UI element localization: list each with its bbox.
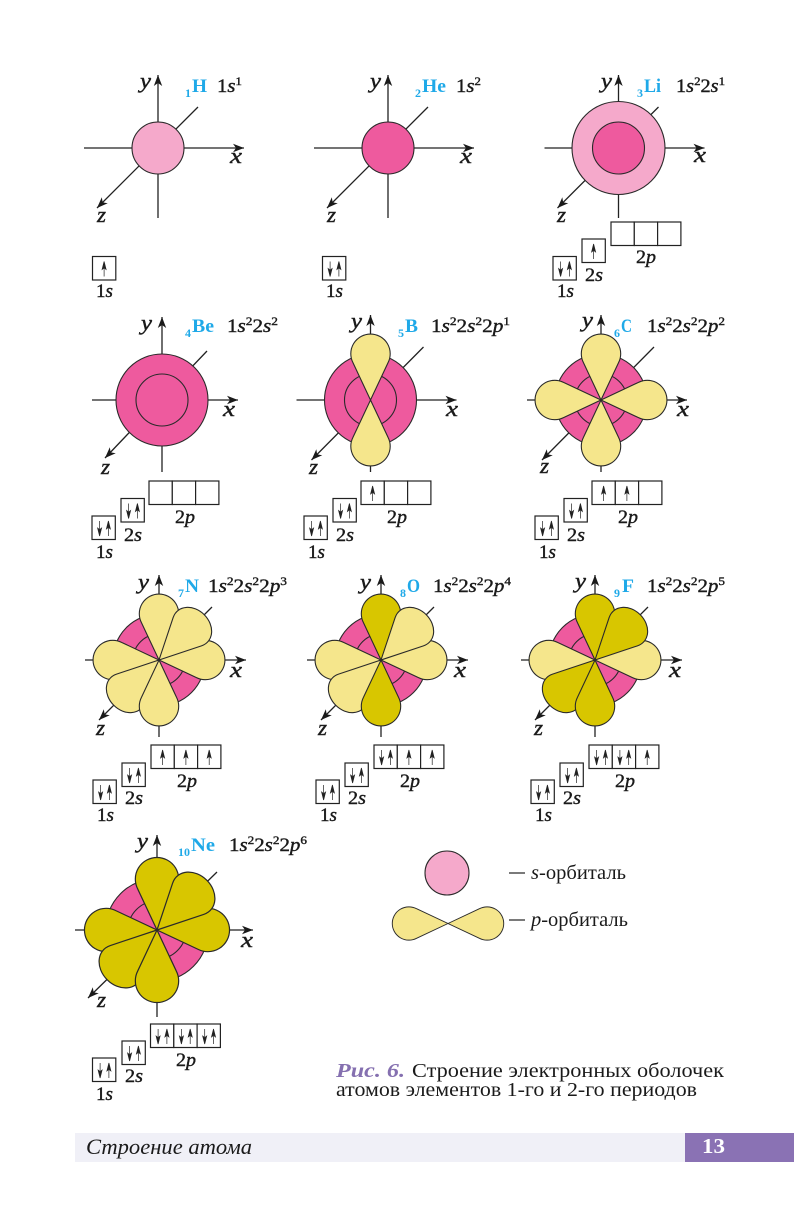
axes xyxy=(314,75,474,218)
axis labels xyxy=(96,828,253,1012)
axis labels: z xyxy=(556,202,566,227)
orbital boxes xyxy=(316,745,444,826)
axis labels: z xyxy=(96,987,106,1012)
electron configuration: 1s xyxy=(227,316,245,337)
electron configuration: 2 xyxy=(452,574,458,588)
orbital boxes: 1s xyxy=(96,281,113,302)
axis labels: y xyxy=(136,569,149,594)
electron configuration: 2 xyxy=(700,76,711,97)
electron configuration: 2 xyxy=(694,74,700,88)
electron configuration: s xyxy=(683,576,691,597)
element symbol xyxy=(614,316,632,340)
page number: 13 xyxy=(702,1134,725,1158)
element symbol: 6 xyxy=(614,326,620,340)
electron configuration: 2 xyxy=(483,576,494,597)
electron configuration: 5 xyxy=(718,574,725,588)
axis labels: y xyxy=(368,68,381,93)
orbital boxes: 2s xyxy=(348,788,366,809)
legend: s orbital: s-орбиталь xyxy=(531,862,626,884)
s orbital xyxy=(132,122,184,174)
axis labels: x xyxy=(445,396,458,421)
panel: neon xyxy=(75,828,307,1105)
element symbol: 4 xyxy=(185,326,191,340)
element symbol: 2 xyxy=(415,86,421,100)
axis labels xyxy=(533,568,681,740)
electron configuration: s xyxy=(469,576,477,597)
axes xyxy=(84,75,244,218)
orbital boxes xyxy=(92,481,219,563)
electron configuration: 2 xyxy=(691,574,697,588)
axis labels: x xyxy=(222,396,235,421)
caption: атомов элементов 1-го и 2-го периодов xyxy=(336,1079,697,1101)
footer xyxy=(75,1133,794,1162)
orbital boxes: 2s xyxy=(124,525,142,546)
element symbol xyxy=(178,835,215,859)
element symbol: N xyxy=(185,576,199,597)
electron configuration: 2 xyxy=(666,574,672,588)
orbital boxes: 2p xyxy=(618,507,638,528)
legend: p orbital: p-орбиталь xyxy=(529,909,628,931)
s orbitals xyxy=(324,354,416,446)
electron configuration: 2 xyxy=(271,314,278,328)
electron configuration: 6 xyxy=(300,833,307,847)
orbital boxes: 1s xyxy=(96,542,113,563)
element symbol: B xyxy=(405,316,418,337)
element symbol: 3 xyxy=(637,86,643,100)
panel: beryllium xyxy=(92,310,278,563)
element symbol xyxy=(178,576,199,600)
axis labels xyxy=(539,307,689,478)
electron configuration: 2 xyxy=(246,314,252,328)
s orbitals xyxy=(335,614,427,706)
orbital boxes: 2s xyxy=(567,525,585,546)
axis labels xyxy=(556,68,706,227)
caption: Строение электронных оболочек xyxy=(412,1060,724,1082)
orbital boxes: 2s xyxy=(336,525,354,546)
orbital boxes: 2p xyxy=(387,507,407,528)
running title: Строение атома xyxy=(86,1134,252,1159)
caption xyxy=(335,1060,724,1101)
element symbol: F xyxy=(622,576,634,597)
electron configuration: 2 xyxy=(672,576,683,597)
axis labels: y xyxy=(358,569,371,594)
panel: helium xyxy=(314,68,481,302)
electron configuration: 1s xyxy=(456,76,474,97)
electron configuration: p xyxy=(492,576,504,597)
electron configuration: 1 xyxy=(235,74,242,88)
electron configuration: 2 xyxy=(457,316,467,337)
s orbitals xyxy=(113,614,205,706)
electron configuration: p xyxy=(490,316,503,337)
orbital boxes: 1s xyxy=(308,542,325,563)
electron configuration: 2 xyxy=(259,576,270,597)
electron configuration: p xyxy=(706,316,718,337)
axis labels: x xyxy=(668,657,681,682)
element symbol: 1 xyxy=(185,86,191,100)
element symbol xyxy=(614,576,634,600)
element symbol xyxy=(400,576,420,600)
legend: p orbital xyxy=(392,907,628,940)
legend xyxy=(392,851,628,940)
electron configuration: 2 xyxy=(697,316,708,337)
orbital boxes: 2s xyxy=(125,788,143,809)
panel: lithium xyxy=(544,68,725,302)
axis labels: z xyxy=(317,715,327,740)
element symbol: Ne xyxy=(191,835,215,856)
electron configuration: 2 xyxy=(273,833,279,847)
element symbol xyxy=(398,316,418,340)
axis labels: z xyxy=(308,454,318,479)
axis labels: x xyxy=(229,657,242,682)
orbital boxes: 1s xyxy=(96,1084,113,1105)
orbital boxes xyxy=(92,256,116,302)
axes xyxy=(307,575,468,737)
orbital boxes: 2s xyxy=(563,788,581,809)
panel: nitrogen xyxy=(85,569,287,826)
element symbol: 5 xyxy=(398,326,404,340)
axis labels xyxy=(308,308,458,479)
axes xyxy=(544,75,704,218)
orbital boxes: 1s xyxy=(539,542,556,563)
axis labels: x xyxy=(453,657,466,682)
element symbol xyxy=(185,316,214,340)
electron configuration: s xyxy=(711,76,719,97)
electron configuration: 2 xyxy=(254,835,265,856)
element symbol: H xyxy=(192,76,207,97)
p orbital xyxy=(351,334,390,466)
axis labels xyxy=(95,569,242,740)
orbital boxes: 2p xyxy=(636,247,656,268)
axis labels: z xyxy=(326,202,336,227)
element symbol: C xyxy=(621,316,632,337)
electron configuration: 2 xyxy=(475,314,482,328)
element symbol: 9 xyxy=(614,586,620,600)
electron configuration: s xyxy=(467,316,475,337)
panel: hydrogen xyxy=(84,68,244,302)
element symbol xyxy=(185,76,207,100)
footer bar xyxy=(75,1133,685,1162)
electron configuration: 2 xyxy=(666,314,672,328)
electron configuration: 1s xyxy=(676,76,694,97)
axis labels: y xyxy=(599,68,612,93)
electron configuration: p xyxy=(706,576,718,597)
electron configuration: 1s xyxy=(229,835,247,856)
orbital boxes: 1s xyxy=(557,281,574,302)
p orbitals xyxy=(315,594,447,726)
orbital boxes: 2p xyxy=(177,771,197,792)
orbital boxes xyxy=(304,481,431,563)
axes xyxy=(521,575,682,737)
panel: carbon xyxy=(527,307,725,563)
axes xyxy=(527,315,687,472)
electron configuration: 2 xyxy=(482,316,493,337)
orbital boxes: 1s xyxy=(320,805,337,826)
axis labels: z xyxy=(539,453,549,478)
p orbitals xyxy=(93,594,225,726)
electron configuration: 1 xyxy=(503,314,510,328)
panel: boron xyxy=(296,308,510,563)
orbital boxes: 1s xyxy=(97,805,114,826)
axis labels: x xyxy=(676,396,689,421)
element symbol: 10 xyxy=(178,845,190,859)
p orbitals xyxy=(535,334,667,466)
electron configuration: 2 xyxy=(252,316,263,337)
axis labels: y xyxy=(135,828,148,853)
electron configuration: p xyxy=(288,835,300,856)
element symbol: O xyxy=(407,576,420,597)
orbital boxes: 2p xyxy=(175,507,195,528)
axis labels: x xyxy=(229,143,242,168)
electron configuration: 2 xyxy=(691,314,697,328)
axis labels: z xyxy=(95,715,105,740)
electron configuration: p xyxy=(267,576,280,597)
electron configuration: s xyxy=(244,576,252,597)
s orbital xyxy=(362,122,414,174)
orbital boxes: 2s xyxy=(585,265,603,286)
electron configuration: 1s xyxy=(431,316,449,337)
s orbitals xyxy=(572,102,665,194)
panel: oxygen xyxy=(307,569,511,826)
element symbol: 7 xyxy=(178,586,184,600)
electron configuration: 3 xyxy=(280,574,287,588)
s orbitals xyxy=(116,354,208,446)
axis labels: y xyxy=(139,310,152,335)
electron configuration: 1s xyxy=(647,576,665,597)
electron configuration: 2 xyxy=(697,576,708,597)
axis labels xyxy=(317,569,466,740)
axis labels: z xyxy=(96,202,106,227)
orbital boxes xyxy=(553,222,681,302)
electron configuration: 1s xyxy=(208,576,226,597)
axes xyxy=(75,835,253,1017)
element symbol: He xyxy=(422,76,446,97)
caption: Рис. 6. xyxy=(335,1060,405,1082)
electron configuration: s xyxy=(265,835,273,856)
panel: fluorine xyxy=(521,568,725,826)
electron configuration: s xyxy=(683,316,691,337)
orbital boxes xyxy=(322,256,346,302)
axis labels xyxy=(326,68,472,227)
orbital boxes: 2p xyxy=(400,771,420,792)
electron configuration: 2 xyxy=(252,574,259,588)
s orbitals xyxy=(555,354,647,446)
page number block xyxy=(685,1133,794,1162)
electron configuration: 2 xyxy=(718,314,725,328)
axis labels: y xyxy=(138,68,151,93)
axis labels: y xyxy=(580,307,593,332)
element symbol: Be xyxy=(192,316,214,337)
orbital boxes: 2p xyxy=(615,771,635,792)
orbital boxes xyxy=(93,745,221,826)
orbital boxes xyxy=(535,481,662,563)
axis labels: y xyxy=(349,308,362,333)
element symbol: Li xyxy=(644,76,661,97)
axis labels: y xyxy=(573,568,586,593)
electron configuration: 2 xyxy=(248,833,254,847)
electron configuration: 1s xyxy=(647,316,665,337)
p orbitals xyxy=(84,857,230,1003)
electron configuration: 2 xyxy=(672,316,683,337)
axes xyxy=(85,575,246,737)
electron configuration: 1s xyxy=(433,576,451,597)
axis labels: x xyxy=(240,927,253,952)
electron configuration: 2 xyxy=(477,574,483,588)
electron configuration: 2 xyxy=(234,576,244,597)
orbital boxes: 1s xyxy=(535,805,552,826)
legend: s orbital xyxy=(425,851,626,895)
electron configuration: 2 xyxy=(474,74,481,88)
element symbol xyxy=(637,76,661,100)
orbital boxes xyxy=(92,1024,220,1105)
electron configuration: 2 xyxy=(450,314,457,328)
orbital boxes: 2p xyxy=(176,1050,196,1071)
electron configuration: 4 xyxy=(504,574,511,588)
orbital boxes: 2s xyxy=(125,1066,143,1087)
axis labels xyxy=(96,68,242,227)
electron configuration: 2 xyxy=(279,835,290,856)
orbital boxes: 1s xyxy=(326,281,343,302)
electron configuration: s xyxy=(263,316,271,337)
electron configuration: 2 xyxy=(227,574,234,588)
electron configuration: 2 xyxy=(458,576,469,597)
s orbitals xyxy=(549,614,641,706)
axes xyxy=(92,317,238,472)
axis labels: x xyxy=(459,143,472,168)
orbital boxes xyxy=(531,745,659,826)
axes xyxy=(296,315,456,472)
axis labels: z xyxy=(533,715,543,740)
element symbol xyxy=(415,76,446,100)
axis labels: z xyxy=(100,454,110,479)
p orbitals xyxy=(529,594,661,726)
electron configuration: 1s xyxy=(217,76,235,97)
electron configuration: 1 xyxy=(719,74,725,88)
axis labels: x xyxy=(693,142,706,167)
axis labels xyxy=(100,310,235,479)
s orbitals xyxy=(106,878,208,982)
element symbol: 8 xyxy=(400,586,406,600)
